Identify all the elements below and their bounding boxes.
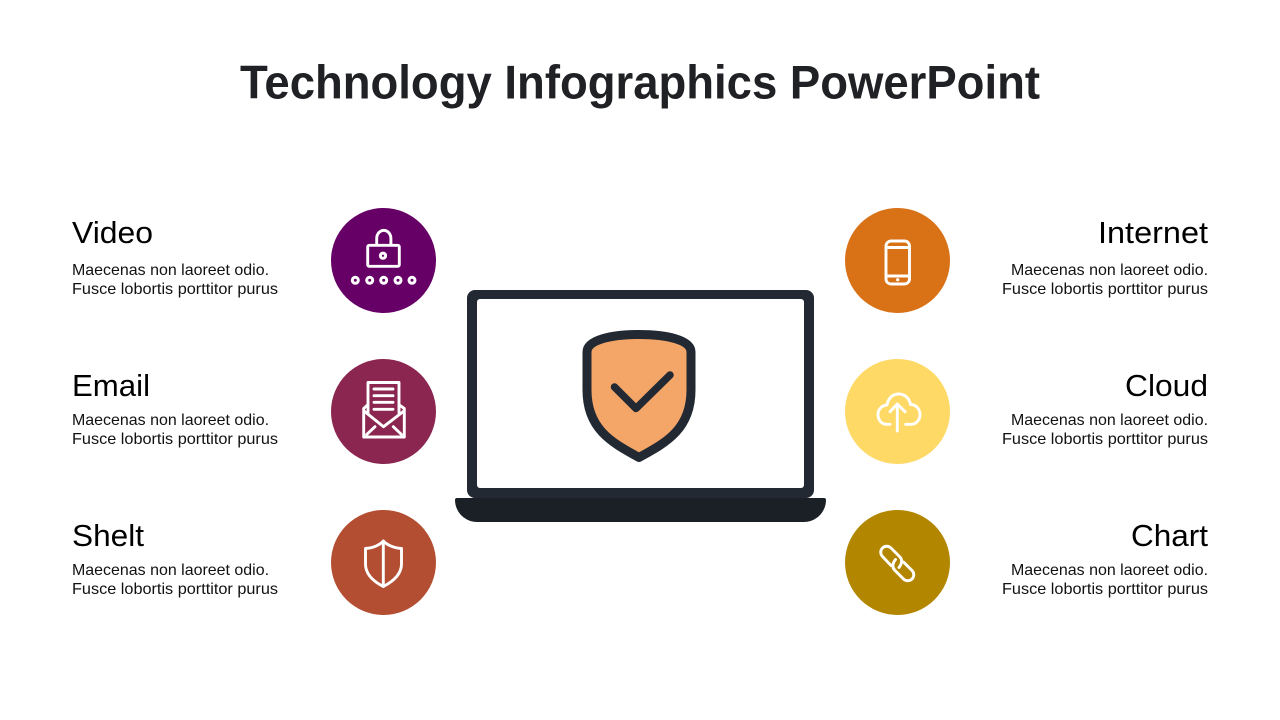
title: Technology Infographics PowerPoint — [240, 56, 1040, 110]
icon: chain link — [845, 510, 950, 615]
heading: email: Email — [72, 368, 150, 403]
text: cloud description — [1002, 412, 1208, 448]
panel: shelt — [72, 510, 436, 615]
panel: email — [72, 359, 436, 464]
icon: padlock with password dots — [331, 208, 436, 313]
heading: shelt: Shelt — [72, 518, 144, 553]
laptop base — [455, 498, 826, 522]
icon: shield — [331, 510, 436, 615]
text: cloud description: Fusce lobortis porttitor purus — [1002, 431, 1208, 448]
text: internet description — [1002, 262, 1208, 298]
icon: smartphone — [845, 208, 950, 313]
text: shelt description: Fusce lobortis porttitor purus — [72, 581, 278, 598]
icon: open envelope with letter — [331, 359, 436, 464]
text: video description: Maecenas non laoreet odio. — [72, 262, 269, 279]
panel: video — [72, 208, 436, 313]
text: chart description: Fusce lobortis porttitor purus — [1002, 581, 1208, 598]
laptop display area — [477, 299, 804, 488]
heading: video: Video — [72, 215, 153, 250]
text: email description: Maecenas non laoreet odio. — [72, 412, 269, 429]
heading: cloud: Cloud — [1125, 368, 1208, 403]
text: shelt description — [72, 562, 278, 598]
panel: cloud — [845, 359, 1208, 464]
panel: chart — [845, 510, 1208, 615]
heading: chart: Chart — [1131, 518, 1208, 553]
icon: cloud upload — [845, 359, 950, 464]
text: cloud description: Maecenas non laoreet odio. — [1011, 412, 1208, 429]
illustration: laptop with shield — [455, 290, 826, 522]
heading: internet: Internet — [1098, 215, 1208, 250]
icon: check mark — [614, 375, 670, 408]
text: internet description: Fusce lobortis porttitor purus — [1002, 281, 1208, 298]
text: email description: Fusce lobortis porttitor purus — [72, 431, 278, 448]
icon: security shield — [587, 334, 691, 458]
laptop screen — [467, 290, 814, 498]
text: video description: Fusce lobortis porttitor purus — [72, 281, 278, 298]
panel: internet — [845, 208, 1208, 313]
text: chart description — [1002, 562, 1208, 598]
text: email description — [72, 412, 278, 448]
text: internet description: Maecenas non laoreet odio. — [1011, 262, 1208, 279]
text: chart description: Maecenas non laoreet odio. — [1011, 562, 1208, 579]
text: video description — [72, 262, 278, 298]
text: shelt description: Maecenas non laoreet odio. — [72, 562, 269, 579]
